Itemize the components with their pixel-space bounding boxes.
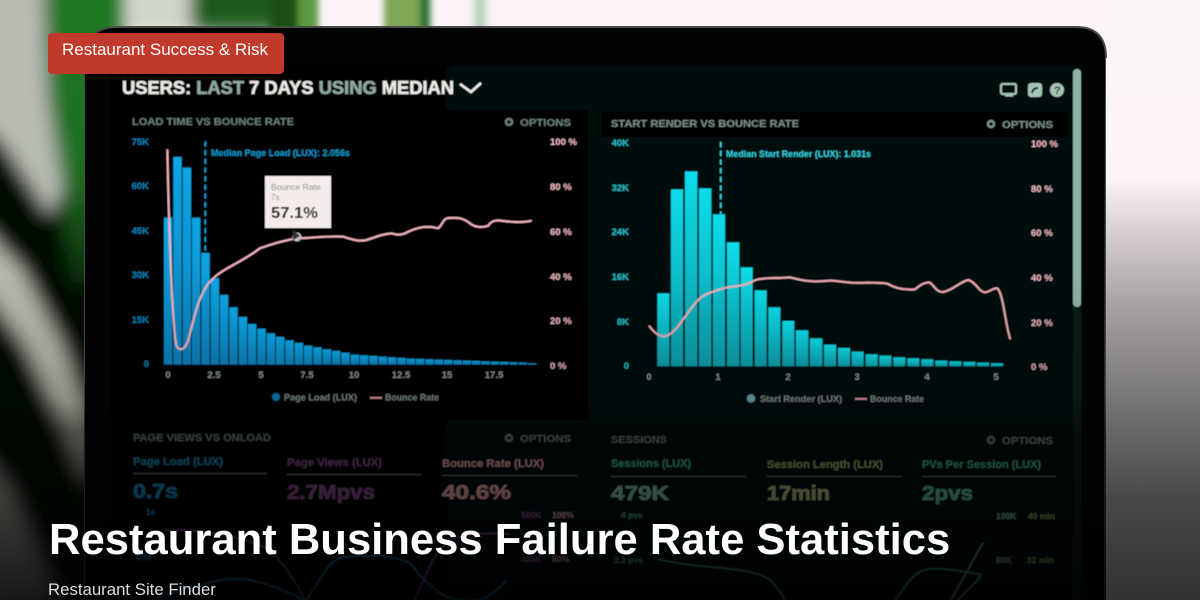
chart: load time vs bounce rate: 17.5 xyxy=(485,370,504,381)
legend: Start Render (LUX) xyxy=(760,394,842,404)
panel: page views vs onload: 80% xyxy=(552,554,569,564)
chart: start render vs bounce rate: 100 % xyxy=(1031,139,1058,150)
panel: sessions: 3.2 pvs xyxy=(614,555,643,565)
panel: sessions: 40 min xyxy=(1028,511,1055,521)
chart: start render vs bounce rate: 24K xyxy=(612,227,629,238)
category badge xyxy=(48,33,284,74)
wall gradient right of the laptop xyxy=(1106,0,1200,600)
chart: start render vs bounce rate: 8K xyxy=(617,317,629,328)
chart: load time vs bounce rate: LOAD TIME VS BOUNCE RATE xyxy=(132,117,294,128)
chart: load time vs bounce rate: 0 % xyxy=(550,361,567,372)
panel: sessions: 2pvs xyxy=(922,483,973,505)
chart: start render vs bounce rate: 5 xyxy=(993,372,999,383)
toolbar icons: ? xyxy=(1054,85,1061,97)
chart: start render vs bounce rate: 20 % xyxy=(1031,318,1053,329)
panel: sessions: Sessions (LUX) xyxy=(611,458,691,470)
chart: start render vs bounce rate xyxy=(611,119,1058,404)
chart: start render vs bounce rate: 0 xyxy=(624,361,629,372)
panel: sessions: 100K xyxy=(996,511,1017,521)
legend: Page Load (LUX) xyxy=(284,392,357,402)
panel: page views vs onload: Page Load (LUX) xyxy=(133,456,223,468)
chart: start render vs bounce rate: 0 % xyxy=(1031,362,1048,373)
panel: page views vs onload: Bounce Rate (LUX) xyxy=(442,458,544,470)
panel: page views vs onload: 40.6% xyxy=(442,482,511,504)
scrollbar xyxy=(1073,68,1081,600)
source line: Restaurant Site Finder xyxy=(48,580,216,599)
panel: page views vs onload: 2.7Mpvs xyxy=(287,482,375,504)
chart: start render vs bounce rate: 32K xyxy=(612,183,629,194)
panel: sessions xyxy=(611,435,1056,600)
panel: sessions: SESSIONS xyxy=(611,435,667,446)
legend xyxy=(272,392,439,402)
chart: load time vs bounce rate: 7.5 xyxy=(300,370,314,381)
chart: load time vs bounce rate: 30K xyxy=(132,270,149,281)
panel: page views vs onload: OPTIONS xyxy=(520,434,571,445)
chart: load time vs bounce rate: 45K xyxy=(132,226,149,237)
chart: load time vs bounce rate: 5 xyxy=(258,370,264,381)
chart: load time vs bounce rate: 12.5 xyxy=(392,370,411,381)
dashboard screen xyxy=(110,66,1082,600)
chart: load time vs bounce rate: Median Page Load (LUX): 2.056s xyxy=(211,148,350,158)
chart: load time vs bounce rate: 75K xyxy=(132,137,149,148)
chart: load time vs bounce rate: 20 % xyxy=(550,316,572,327)
tooltip: Bounce Rate xyxy=(271,182,321,192)
chart: start render vs bounce rate: 40K xyxy=(612,138,629,149)
panel: sessions: 479K xyxy=(611,483,670,505)
panel: page views vs onload: Page Views (LUX) xyxy=(287,457,382,469)
chart: load time vs bounce rate: 0 xyxy=(165,370,171,381)
chart: load time vs bounce rate: 0 xyxy=(144,359,149,370)
panel: page views vs onload: 400K xyxy=(521,554,542,564)
toolbar icons xyxy=(1001,83,1064,97)
chart: start render vs bounce rate: START RENDER VS BOUNCE RATE xyxy=(611,119,799,130)
panel: page views vs onload: 1s xyxy=(146,508,155,517)
chart: start render vs bounce rate: 60 % xyxy=(1031,228,1053,239)
chart: start render vs bounce rate: 4 xyxy=(924,372,930,383)
chart: start render vs bounce rate: 2 xyxy=(785,372,791,383)
panel: page views vs onload: 500K xyxy=(521,510,542,520)
panel: sessions: 80K xyxy=(996,555,1012,565)
chart: load time vs bounce rate: 100 % xyxy=(550,137,577,148)
chart: start render vs bounce rate: Median Start Render (LUX): 1.031s xyxy=(726,149,871,159)
panel: sessions: PVs Per Session (LUX) xyxy=(922,459,1041,471)
chart: start render vs bounce rate: 1 xyxy=(715,372,721,383)
chart: load time vs bounce rate: 10 xyxy=(349,370,359,381)
legend: Bounce Rate xyxy=(870,394,924,404)
chart: load time vs bounce rate: 2.5 xyxy=(207,370,221,381)
tooltip: 57.1% xyxy=(271,205,318,222)
category badge: Restaurant Success & Risk xyxy=(62,40,268,59)
chart: start render vs bounce rate: OPTIONS xyxy=(1002,120,1053,131)
panel: sessions: 4 pvs xyxy=(621,510,643,520)
chart: start render vs bounce rate: 16K xyxy=(612,272,629,283)
chart: start render vs bounce rate: 40 % xyxy=(1031,273,1053,284)
title: Restaurant Business Failure Rate Statistics xyxy=(49,516,950,564)
chart: load time vs bounce rate: 15 xyxy=(442,370,453,381)
chart: load time vs bounce rate: 80 % xyxy=(550,182,572,193)
panel: sessions: 17min xyxy=(767,483,830,505)
panel: page views vs onload: 100% xyxy=(552,510,574,520)
tooltip: 7s xyxy=(271,193,279,202)
dashboard heading: USERS: LAST 7 DAYS USING MEDIAN xyxy=(122,77,454,98)
chart: load time vs bounce rate: OPTIONS xyxy=(520,118,571,129)
chart: start render vs bounce rate: 3 xyxy=(854,372,860,383)
panel backgrounds xyxy=(122,110,1068,420)
panel: sessions: OPTIONS xyxy=(1002,436,1053,447)
panel: page views vs onload: PAGE VIEWS VS ONLOAD xyxy=(133,433,272,444)
chart: load time vs bounce rate: 60 % xyxy=(550,227,572,238)
panel: page views vs onload: 0.8s xyxy=(136,553,152,562)
panel: page views vs onload: 0.7s xyxy=(133,481,178,503)
panel: sessions: Session Length (LUX) xyxy=(767,459,883,471)
panel: page views vs onload xyxy=(133,433,577,600)
panel: sessions: 32 min xyxy=(1027,555,1054,565)
chart: load time vs bounce rate: 40 % xyxy=(550,272,572,283)
chart: load time vs bounce rate: 60K xyxy=(132,181,149,192)
tooltip xyxy=(265,176,331,242)
chart: load time vs bounce rate xyxy=(132,117,577,402)
chart: start render vs bounce rate: 80 % xyxy=(1031,184,1053,195)
chart: start render vs bounce rate: 0 xyxy=(646,372,652,383)
chevron icon xyxy=(460,83,481,92)
chart: load time vs bounce rate: 15K xyxy=(132,315,149,326)
legend xyxy=(747,394,924,404)
legend: Bounce Rate xyxy=(385,392,439,402)
